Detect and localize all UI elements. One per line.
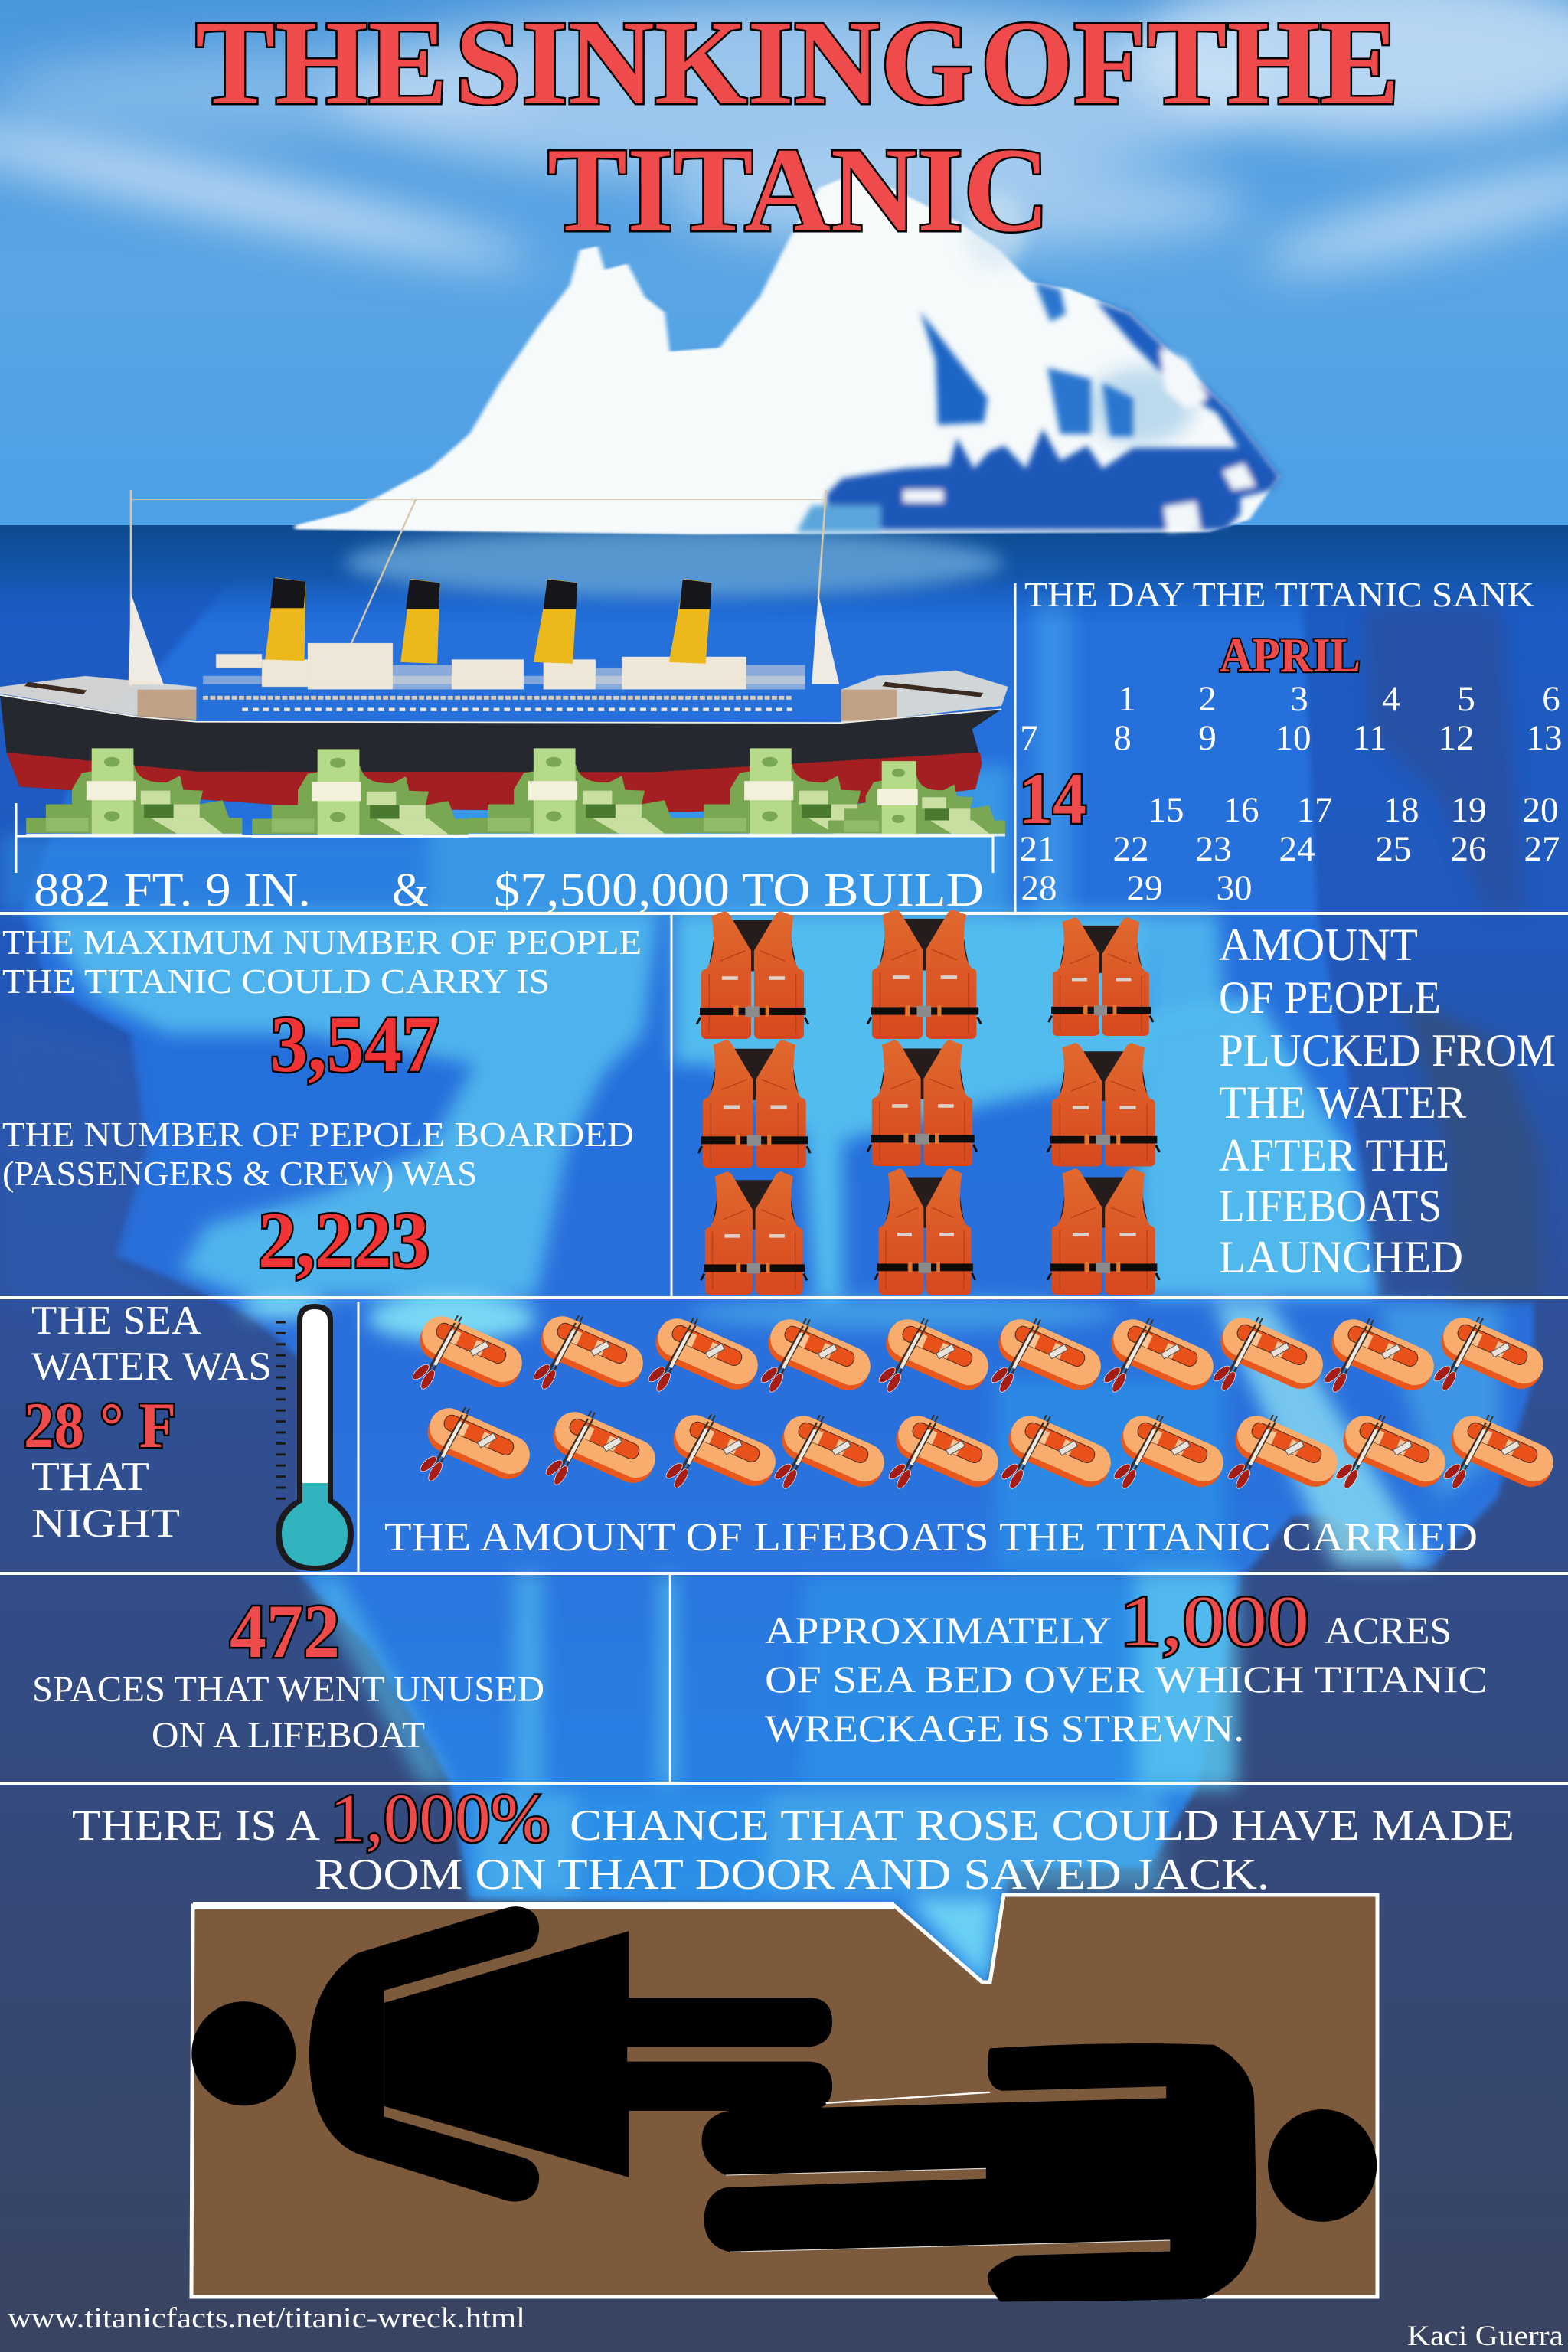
- calendar panel: 17: [1297, 790, 1332, 830]
- calendar panel: 22: [1113, 829, 1148, 869]
- calendar panel: APRIL: [1220, 628, 1361, 682]
- calendar panel: 25: [1375, 829, 1412, 869]
- iceberg above water: [295, 172, 1280, 534]
- ship length and cost text: &: [392, 864, 429, 916]
- wreckage stat: [765, 1582, 1488, 1749]
- unused spaces stat: ON A LIFEBOAT: [152, 1715, 425, 1756]
- calendar panel: 16: [1223, 790, 1259, 830]
- calendar panel: 2: [1198, 679, 1217, 719]
- text: people plucked from the water: LIFEBOATS: [1219, 1181, 1442, 1231]
- calendar panel: 21: [1020, 829, 1055, 869]
- money piles: [26, 748, 1005, 838]
- submerged iceberg: [0, 582, 1539, 1988]
- sea temperature text: 28 ° F: [24, 1390, 176, 1462]
- author credit: Kaci Guerra: [1407, 2321, 1563, 2352]
- wreckage stat: WRECKAGE IS STREWN.: [765, 1707, 1244, 1749]
- passenger capacity text: THE MAXIMUM NUMBER OF PEOPLE: [2, 923, 642, 962]
- passenger capacity text: 3,547: [270, 999, 439, 1089]
- calendar panel: 27: [1524, 829, 1560, 869]
- title: TITANIC: [547, 123, 1050, 257]
- wreckage stat: OF SEA BED OVER WHICH TITANIC: [765, 1658, 1488, 1700]
- door top edge: [193, 1902, 894, 1909]
- calendar panel: 10: [1276, 718, 1311, 758]
- calendar panel: 18: [1383, 790, 1419, 830]
- sea temperature text: [24, 1298, 272, 1546]
- passenger capacity text: [2, 923, 642, 1285]
- lifeboats caption: THE AMOUNT OF LIFEBOATS THE TITANIC CARRIED: [384, 1515, 1478, 1560]
- calendar panel: 8: [1113, 718, 1132, 758]
- calendar panel: 9: [1198, 718, 1217, 758]
- calendar panel: 30: [1216, 868, 1253, 908]
- calendar panel: 7: [1020, 718, 1038, 758]
- Rose and Jack statement: [72, 1781, 1514, 1899]
- calendar panel: 20: [1522, 790, 1559, 830]
- Rose and Jack statement: ROOM ON THAT DOOR AND SAVED JACK.: [315, 1851, 1269, 1899]
- wreckage stat: 1,000: [1119, 1582, 1309, 1661]
- calendar panel: 5: [1457, 679, 1475, 719]
- unused spaces stat: SPACES THAT WENT UNUSED: [32, 1669, 544, 1710]
- title: THE SINKING OF THE: [195, 0, 1400, 130]
- lifeboats: [410, 1310, 1560, 1493]
- funnels: [265, 577, 711, 664]
- calendar panel: 12: [1438, 718, 1475, 758]
- unused spaces stat: [32, 1589, 544, 1756]
- calendar panel: 1: [1118, 679, 1136, 719]
- calendar panel: 13: [1527, 718, 1562, 758]
- wreckage stat: APPROXIMATELY: [765, 1609, 1112, 1651]
- passenger capacity text: THE TITANIC COULD CARRY IS: [2, 962, 550, 1001]
- calendar panel: [1019, 576, 1562, 908]
- figure: Rose: [191, 1906, 832, 2202]
- icon: thermometer: [276, 1304, 354, 1571]
- door panel: [191, 1895, 1377, 2297]
- passenger capacity text: THE NUMBER OF PEPOLE BOARDED: [2, 1116, 634, 1154]
- ship: Titanic: [0, 490, 1008, 838]
- ship length and cost text: 882 FT. 9 IN.: [34, 864, 311, 916]
- text: people plucked from the water: OF PEOPLE: [1219, 972, 1441, 1023]
- calendar panel: 3: [1290, 679, 1308, 719]
- unused spaces stat: 472: [230, 1589, 340, 1674]
- text: people plucked from the water: AMOUNT: [1219, 920, 1418, 970]
- calendar panel: 23: [1196, 829, 1231, 869]
- life jackets: [697, 910, 1159, 1295]
- text: people plucked from the water: LAUNCHED: [1219, 1232, 1463, 1282]
- calendar panel: 19: [1450, 790, 1487, 830]
- source url: www.titanicfacts.net/titanic-wreck.html: [8, 2302, 525, 2334]
- text: people plucked from the water: [1219, 920, 1556, 1282]
- title: [195, 0, 1400, 257]
- sea temperature text: NIGHT: [31, 1501, 180, 1546]
- Rose and Jack statement: THERE IS A: [72, 1802, 320, 1850]
- clouds: [0, 0, 1568, 289]
- background: underwater gradient: [0, 574, 1568, 2352]
- passenger capacity text: 2,223: [258, 1195, 430, 1285]
- ship length and cost text: $7,500,000 TO BUILD: [494, 864, 984, 916]
- calendar panel: 24: [1279, 829, 1315, 869]
- calendar panel: 4: [1382, 679, 1400, 719]
- dark iceberg shadows: [1363, 597, 1524, 911]
- Rose and Jack statement: 1,000%: [330, 1781, 550, 1857]
- calendar panel: 26: [1450, 829, 1487, 869]
- background: sea surface band: [0, 525, 1568, 625]
- sea temperature text: WATER WAS: [31, 1344, 272, 1389]
- figure: Jack: [702, 2043, 1377, 2301]
- text: people plucked from the water: THE WATER: [1219, 1077, 1466, 1128]
- sea temperature text: THAT: [31, 1455, 149, 1499]
- sea temperature text: THE SEA: [31, 1298, 201, 1343]
- calendar panel: 14: [1019, 758, 1086, 839]
- calendar panel: 6: [1542, 679, 1560, 719]
- length bracket: [16, 803, 993, 873]
- dividers: [0, 583, 1568, 1783]
- calendar panel: 11: [1352, 718, 1387, 758]
- calendar panel: 28: [1021, 868, 1057, 908]
- calendar panel: 29: [1127, 868, 1162, 908]
- calendar panel: 15: [1148, 790, 1184, 830]
- hull: [0, 695, 1001, 812]
- text: people plucked from the water: PLUCKED FROM: [1219, 1025, 1556, 1076]
- calendar panel: THE DAY THE TITANIC SANK: [1024, 576, 1535, 614]
- Rose and Jack statement: CHANCE THAT ROSE COULD HAVE MADE: [570, 1802, 1514, 1850]
- figures on door: [191, 1906, 1377, 2301]
- wreckage stat: ACRES: [1325, 1609, 1452, 1651]
- ship length and cost text: [34, 864, 984, 916]
- passenger capacity text: (PASSENGERS & CREW) WAS: [2, 1155, 477, 1193]
- background: sky: [0, 0, 1568, 536]
- text: people plucked from the water: AFTER THE: [1219, 1130, 1449, 1181]
